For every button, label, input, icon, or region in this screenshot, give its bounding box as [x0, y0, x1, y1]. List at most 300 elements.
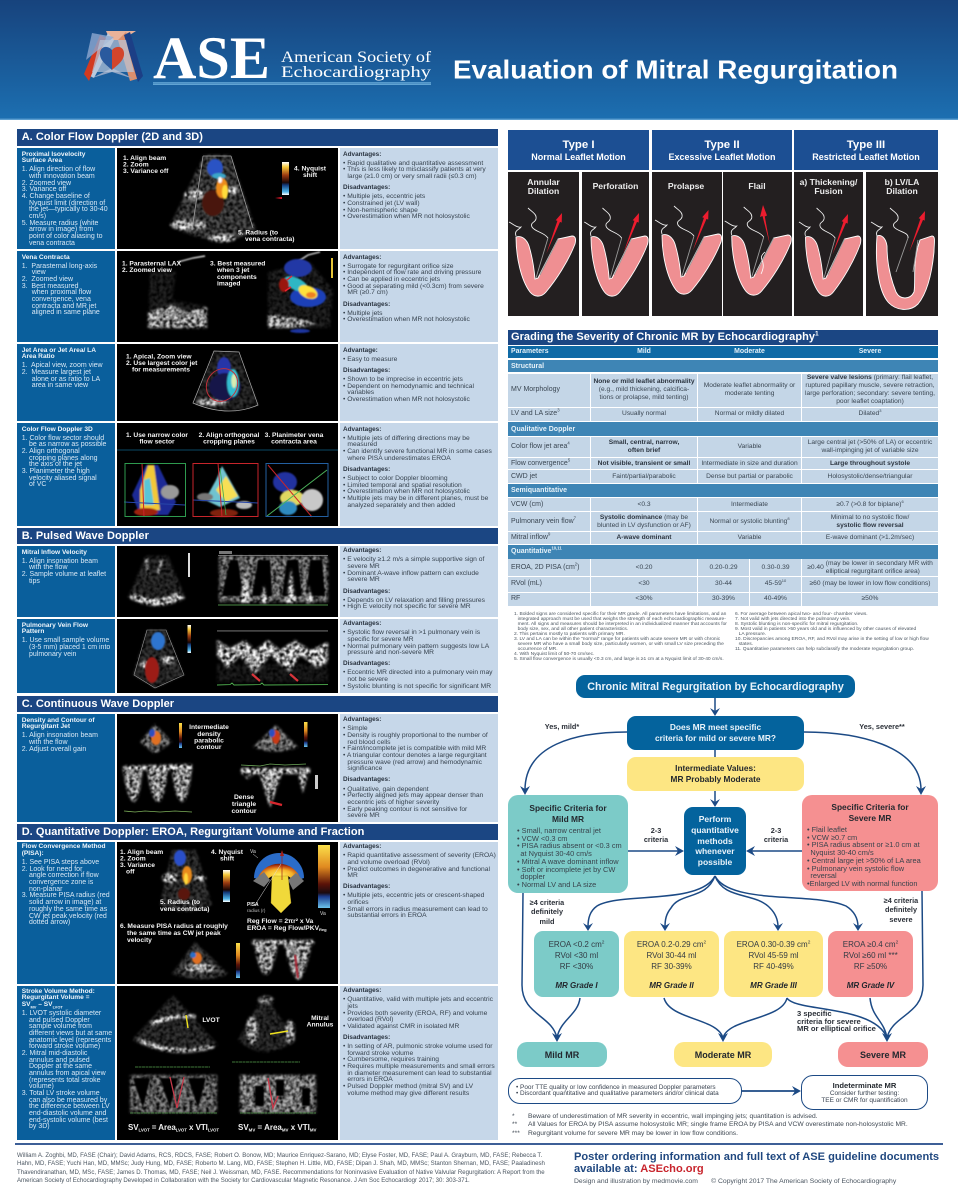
flow label: 2-3 criteria left: 2-3 — [651, 826, 661, 835]
flowchart title — [576, 675, 855, 698]
panel: pulmonary vein pros and cons: Advantages: — [343, 620, 381, 627]
panel: PISA pros and cons: large (≥1.0 cm) or very small radii (≤0.3 cm) — [347, 173, 477, 180]
design and copyright line: Design and illustration by medmovie.com © Copyright 2017 The American Society of Echocardiography — [574, 1178, 896, 1184]
panel: pulmonary vein pros and cons: pressure and non-severe MR — [347, 649, 434, 656]
table footnotes: left: 4. With Nyquist limit of 50-70 cm/sec. — [514, 652, 594, 657]
indeterminate MR box: TEE or CMR for quantification — [821, 1096, 908, 1104]
panel: pulmonary vein pros and cons: • Systolic blunting is not specific for significant MR — [343, 683, 491, 690]
panel: stroke volume method steps: SVMV – SVLVOT — [22, 1001, 63, 1009]
row: flow convergence — [508, 457, 938, 469]
image: stroke volume echo and Doppler: MV — [249, 1127, 255, 1132]
diagram: perforation — [582, 172, 649, 316]
table footnotes: left — [514, 612, 727, 662]
panel: stroke volume method steps: 3. Total LV stroke volume — [22, 1090, 100, 1097]
row: LV and LA size: Dilated3 — [859, 408, 881, 417]
image: stroke volume echo and Doppler: = Area — [150, 1123, 176, 1132]
table footnotes: left: integrated approach must be used that weighs the strength of each echocardiographic measure- — [518, 617, 726, 622]
row: VCW — [508, 498, 938, 511]
panel: PISA method pros and cons: and volume overload (RVol) — [347, 859, 430, 866]
panel: stroke volume method steps: 1. LVOT systolic diameter — [22, 1010, 101, 1017]
flow label: 3 specific criteria: MR or elliptical orifice — [797, 1024, 876, 1033]
flowchart footnotes: * — [512, 1113, 515, 1120]
panel: PISA method pros and cons: • Rapid quantitative assessment of severity (EROA) — [343, 852, 496, 859]
row: EROA: 0.20-0.29 — [709, 564, 738, 571]
logo wordmark — [153, 25, 432, 91]
flow label: at least 4 criteria severe: definitely — [885, 905, 917, 914]
image: jet area echo: 1. Apical, Zoom view — [126, 354, 192, 360]
diagram: LV and LA dilation — [866, 172, 938, 316]
row: pulmonary vein flow: Pulmonary vein flow7 — [511, 515, 576, 525]
row: CWD jet: Dense but partial or parabolic — [706, 473, 793, 480]
panel: vena contracta steps: Vena Contracta — [22, 254, 70, 261]
panel: pulmonary vein steps: Pattern — [22, 628, 44, 635]
row: CWD jet: Faint/partial/parabolic — [612, 473, 676, 480]
row: color flow jet area: Variable — [738, 443, 761, 450]
flowchart footnotes: Regurgitant volume for severe MR may be lower in low flow conditions. — [528, 1130, 738, 1137]
heading: section D — [17, 824, 498, 840]
severe criteria box — [802, 795, 938, 891]
panel: 3D Doppler steps: Color Flow Doppler 3D — [22, 426, 93, 433]
grade I box — [534, 931, 619, 997]
panel: stroke volume method steps: can also be measured by — [29, 1097, 107, 1104]
panel: stroke volume method steps: end-systolic volume (best — [29, 1117, 108, 1124]
panel: PISA steps: Proximal Isovelocity — [22, 151, 85, 158]
panel: mitral inflow pros and cons: • Dominant A-wave inflow pattern can exclude — [343, 570, 479, 577]
flow label: 3 specific criteria: 3 specific — [797, 1009, 832, 1018]
row: mitral inflow: E-wave dominant (>1.2m/sec) — [826, 534, 914, 541]
row: MV morphology: ruptured papillary muscle, severe retraction, — [805, 382, 935, 389]
panel: pulmonary vein pros and cons: Disadvantages: — [343, 660, 390, 667]
image: PISA diagram and echo: Va — [250, 849, 256, 855]
diagram: flail: Flail — [748, 181, 766, 191]
grade IV box: EROA ≥0.4 cm2 — [843, 940, 898, 949]
panel: CW density pros and cons: • Simple — [343, 725, 368, 732]
severe criteria box: •Enlarged LV with normal function — [807, 879, 918, 888]
panel: pulmonary vein steps: (3-5 mm) placed 1 cm into — [29, 644, 110, 651]
heading: section A: A. Color Flow Doppler (2D and 3D) — [22, 131, 203, 143]
image: PISA color Doppler echo: 5. Radius (to — [238, 230, 278, 236]
severe criteria box: Nyquist 30-40 cm/s — [810, 848, 874, 857]
panel: stroke volume pros and cons: • Pulsed Doppler method (mitral SV) and LV — [343, 1083, 473, 1090]
diagram: LV and LA dilation: b) LV/LA — [885, 177, 919, 187]
indeterminate MR box — [801, 1075, 928, 1110]
image: 3D Doppler crops: 1. Use narrow color — [126, 432, 188, 439]
panel: stroke volume method steps: annulus and pulsed — [29, 1057, 90, 1064]
table footnotes: right: 11. Quantitative parameters can help subclassify the moderate regurgitation group. — [735, 647, 914, 652]
image: PISA diagram and echo: 6. Measure PISA radius at roughly — [120, 923, 228, 930]
panel: PISA method steps: dotted arrow) — [29, 919, 70, 926]
row: RF: RF — [511, 595, 520, 602]
image: CW Doppler jets: triangle — [232, 801, 256, 808]
image: vena contracta echo: 2. Zoomed view — [122, 267, 173, 274]
author credits: Thavendiranathan, MD, MSc, FASE; James D. Thomas, MD, FASE; Neil J. Weissman, MD, FASE. Recommendations for Noninvasive Evaluation of Native Valvular Regurgitation: A Report from the — [17, 1169, 545, 1176]
image: PISA color Doppler echo: shift — [303, 172, 318, 179]
grade II box: RF 30-39% — [651, 962, 692, 971]
panel: CW density pros and cons: Disadvantages: — [343, 776, 390, 783]
heading: Type III: Restricted Leaflet Motion — [812, 152, 920, 162]
image: PISA diagram and echo: Va — [320, 911, 326, 917]
panel: PISA steps: 3. Variance off — [22, 186, 66, 193]
panel: 3D Doppler steps — [17, 423, 115, 526]
panel: vena contracta pros and cons — [340, 251, 498, 342]
image: stroke volume echo and Doppler: LVOT — [139, 1127, 150, 1132]
row: EROA — [508, 559, 938, 576]
row: EROA: ≥0.40 — [807, 564, 824, 571]
image: stroke volume echo and Doppler: MV — [310, 1127, 316, 1132]
severe criteria box: reversal — [810, 871, 837, 880]
panel: stroke volume pros and cons: • Requires multiple measurements and small errors — [343, 1063, 495, 1070]
panel: stroke volume method steps: forward stroke volume) — [29, 1043, 100, 1050]
poster ordering information: available at: ASEcho.org — [574, 1163, 704, 1175]
image: PISA diagram and echo: Reg — [319, 927, 327, 932]
panel: stroke volume method steps: the difference between LV — [29, 1103, 110, 1110]
flowchart question box: criteria for mild or severe MR? — [655, 733, 776, 743]
row: pulmonary vein flow — [508, 512, 938, 531]
panel: jet area steps: Jet Area or Jet Area/ LA — [22, 347, 96, 354]
image: jet area echo: 2. Use largest color jet — [126, 360, 198, 367]
panel: stroke volume method steps: Regurgitant Volume = — [22, 994, 90, 1001]
table footnotes: right: LA pressure. — [739, 632, 766, 637]
flow label: yes mild: Yes, mild* — [545, 722, 579, 731]
image: vena contracta echo: 3. Best measured — [210, 260, 265, 268]
panel: CW density steps — [17, 714, 115, 822]
flowchart intermediate values box: MR Probably Moderate — [671, 774, 760, 784]
table footnotes: right: 8. Systolic blunting is non-specific for mitral regurgitation. — [735, 622, 858, 627]
panel: PISA pros and cons: Disadvantages: — [343, 184, 390, 191]
table footnotes: left: body size, sex, and all other patient characteristics. — [518, 627, 628, 632]
panel: PISA steps: cm/s) — [29, 213, 46, 220]
outcome: mild MR — [517, 1042, 607, 1067]
row: RF: 30-39% — [712, 595, 735, 602]
panel: vena contracta pros and cons: • Independent of flow rate and driving pressure — [343, 269, 481, 276]
row: pulmonary vein flow: Systolic dominance (may be — [600, 514, 688, 521]
image: jet area echo: for measurements — [132, 366, 190, 374]
heading: grading table title — [508, 330, 938, 345]
image: 3D Doppler crops: 2. Align orthogonal — [199, 432, 259, 439]
image: CW Doppler jets: Dense — [234, 794, 254, 801]
image: CW Doppler jets — [117, 714, 338, 822]
flow label: at least 4 criteria mild: ≥4 criteria — [530, 898, 564, 907]
section: structural: Structural — [511, 362, 544, 370]
panel: vena contracta steps: convergence, vena — [32, 296, 91, 303]
image: PISA diagram and echo: 5. Radius (to — [160, 899, 200, 906]
panel: 3D Doppler pros and cons: • Overestimation when MR not holosystolic — [343, 488, 470, 495]
panel: CW density pros and cons: significance — [347, 765, 382, 772]
flow label: 2-3 criteria left: criteria — [644, 835, 668, 844]
row: VCW: <0.3 — [637, 501, 651, 508]
row: RF: ≥50% — [862, 595, 878, 602]
panel: stroke volume method steps: 2. Mitral mid-diastolic — [22, 1050, 87, 1057]
row: MV morphology — [508, 374, 938, 407]
severe criteria box: Severe MR — [849, 812, 891, 822]
image: PISA diagram and echo: PISA — [247, 902, 259, 908]
severe criteria box: • Central large jet >50% of LA area — [807, 856, 921, 865]
row: pulmonary vein flow: blunted in LV dysfunction or AF) — [597, 522, 691, 528]
panel: 3D Doppler pros and cons: • Limited temporal and spatial resolution — [343, 482, 462, 489]
panel: stroke volume pros and cons: overload (RVol) — [347, 1016, 393, 1023]
panel: vena contracta steps: 3. Best measured — [22, 283, 78, 290]
caveats box: • Poor TTE quality or low confidence in measured Doppler parameters — [516, 1084, 716, 1091]
panel: 3D Doppler pros and cons: analyzed separately and then added — [347, 502, 455, 509]
panel: stroke volume pros and cons: errors in EROA — [347, 1076, 393, 1083]
panel: stroke volume pros and cons: • Quantitative, valid with multiple jets and eccentric — [343, 996, 493, 1003]
footer rule — [15, 1143, 943, 1145]
image: mitral inflow echo and Doppler — [117, 546, 338, 617]
panel: vena contracta pros and cons: • Surrogate for regurgitant orifice size — [343, 263, 454, 270]
panel: pulmonary vein pros and cons: • Eccentric MR directed into a pulmonary vein may — [343, 669, 493, 676]
row: LV and LA size — [508, 408, 938, 421]
row: pulmonary vein flow: systolic flow reversal — [836, 522, 904, 528]
flowchart intermediate values box — [627, 757, 804, 791]
flow label: 2-3 criteria right: criteria — [764, 835, 788, 844]
table footnotes: right: states. — [739, 642, 753, 647]
section: semiquantitative — [508, 484, 938, 497]
row: flow convergence: Intermediate in size and duration — [701, 460, 798, 467]
panel: 3D Doppler pros and cons: • Multiple jets may be in different planes, must be — [343, 495, 488, 502]
panel: CW density pros and cons: severe MR — [347, 812, 380, 819]
image: stroke volume echo and Doppler: x VTI — [187, 1123, 208, 1132]
image: PISA diagram and echo: 4. Nyquist — [211, 849, 244, 856]
row: color flow jet area: often brief — [628, 447, 660, 454]
row: MV morphology: MV Morphology — [511, 386, 560, 393]
table footnotes: right: 10. Discrepancies among EROA, RF, and RVol may arise in the setting of low or high flow — [735, 637, 929, 642]
panel: 3D Doppler pros and cons — [340, 423, 498, 526]
panel: PISA method steps: 2. Look for need for — [22, 866, 82, 873]
panel: 3D Doppler steps: 1. Color flow sector should — [22, 435, 104, 442]
panel: jet area steps: 2. Measure largest jet — [22, 369, 91, 376]
image: PISA diagram and echo: Reg Flow = 2πr² x Va — [247, 918, 314, 925]
panel: PISA method steps: 1. See PISA steps above — [22, 859, 99, 866]
table footnotes: left: 3. LV and LA can be within the "normal" range for patients with acute severe MR or with chronic — [514, 637, 720, 642]
image: PISA diagram and echo: vena contracta) — [160, 906, 209, 913]
diagram: thickening and fusion: a) Thickening/ — [800, 177, 858, 187]
panel: stroke volume method steps: by 3D) — [29, 1123, 50, 1130]
panel: 3D Doppler pros and cons: where PISA underestimates EROA — [347, 455, 451, 462]
panel: PISA steps: point of color aliasing to — [29, 233, 103, 240]
row: color flow jet area: Color flow jet area4 — [511, 440, 570, 450]
panel: jet area pros and cons: • Dependent on hemodynamic and technical — [343, 383, 474, 390]
panel: CW density pros and cons: • A triangular contour denotes a large regurgitant — [343, 752, 487, 759]
panel: stroke volume method steps: and pulsed Doppler — [29, 1017, 90, 1024]
panel: PISA steps: 2. Zoomed view — [22, 180, 71, 187]
panel: jet area pros and cons: • Easy to measure — [343, 356, 397, 363]
table footnotes: right: 9. Most valid in patients >50 years old and is influenced by other causes of elevated — [735, 627, 916, 632]
image: stroke volume echo and Doppler: LVOT — [176, 1127, 187, 1132]
panel: PISA method steps: angle correction if flow — [29, 872, 99, 879]
flowchart question box — [627, 716, 804, 750]
row: MV morphology: (e.g., mild thickening, calcifica- — [599, 386, 689, 393]
flowchart footnotes: All Values for EROA by PISA assume holosystolic MR; single frame EROA by PISA and VCW overestimate non-holosystolic MR. — [528, 1121, 908, 1128]
panel: pulmonary vein steps: pulmonary vein — [29, 651, 76, 658]
outcome: moderate MR: Moderate MR — [695, 1050, 751, 1060]
panel: mitral inflow pros and cons — [340, 546, 498, 617]
panel: stroke volume pros and cons: Advantages: — [343, 987, 381, 994]
row: MV morphology: poor leaflet coaptation) — [836, 398, 904, 405]
panel: CW density steps: Density and Contour of — [22, 717, 95, 724]
heading: Type I — [508, 130, 649, 170]
panel: mitral inflow steps: with the flow — [29, 564, 68, 571]
panel: stroke volume method steps — [17, 986, 115, 1140]
heading: section B: B. Pulsed Wave Doppler — [22, 530, 149, 542]
row: mitral inflow: Mitral inflow9 — [511, 532, 550, 541]
panel: PISA method steps: CW jet peak velocity (red — [29, 912, 107, 920]
panel: 3D Doppler pros and cons: • Can identify severe functional MR in some cases — [343, 448, 492, 455]
panel: 3D Doppler steps: 2. Align orthogonal — [22, 448, 80, 455]
panel: PISA steps — [17, 148, 115, 249]
row: pulmonary vein flow: Minimal to no systolic flow/ — [831, 514, 909, 521]
heading: section B — [17, 528, 498, 544]
row: VCW: VCW (cm) — [511, 501, 543, 508]
panel: PISA method pros and cons: Disadvantages: — [343, 883, 390, 890]
panel: mitral inflow steps: Mitral Inflow Velocity — [22, 549, 87, 556]
table header row: Parameters — [511, 348, 549, 355]
panel: stroke volume method steps: (represents total stroke — [29, 1077, 101, 1084]
diagram: LV and LA dilation: Dilation — [886, 186, 918, 196]
image: PISA diagram and echo: 3. Variance — [120, 862, 155, 869]
image: CW Doppler jets: contour — [232, 808, 257, 815]
section: structural — [508, 360, 938, 372]
panel: stroke volume method steps: volume) — [29, 1083, 54, 1090]
indeterminate MR box: Indeterminate MR — [833, 1080, 896, 1090]
image: jet area echo — [117, 344, 338, 421]
author credits: American Society of Echocardiography Developed in Collaboration with the Society for Cardiovascular Magnetic Resonance. J Am Soc Echocardiogr 2017; 30: 303-371. — [17, 1177, 470, 1184]
panel: pulmonary vein steps: Pulmonary Vein Flow — [22, 622, 88, 629]
row: MV morphology: Moderate leaflet abnormality or — [704, 382, 795, 389]
row: flow convergence: Flow convergence5 — [511, 457, 570, 467]
heading: Type I: Normal Leaflet Motion — [531, 152, 626, 162]
panel: mitral inflow pros and cons: • Depends on LV relaxation and filling pressures — [343, 597, 485, 604]
panel: PISA method pros and cons — [340, 842, 498, 984]
panel: stroke volume method steps: Stroke Volume Method: — [22, 988, 95, 995]
grade II box: MR Grade II — [649, 981, 694, 990]
panel: CW density steps: with the flow — [29, 739, 68, 746]
panel: stroke volume pros and cons: • In setting of AR, pulmonic stroke volume used for — [343, 1043, 493, 1050]
severe criteria box: • VCW ≥0.7 cm — [807, 833, 857, 842]
image: 3D Doppler crops — [117, 423, 338, 526]
panel: vena contracta pros and cons: • Overestimation when MR not holosystolic — [343, 316, 470, 323]
panel: pulmonary vein pros and cons: • Normal pulmonary vein pattern suggests low LA — [343, 643, 489, 650]
panel: stroke volume pros and cons: in diameter measurement can lead to substantial — [347, 1070, 492, 1077]
panel: CW density steps: Regurgitant Jet — [22, 723, 70, 730]
panel: vena contracta pros and cons: Disadvantages: — [343, 300, 390, 308]
grade I box: EROA <0.2 cm2 — [549, 940, 604, 949]
diagram: prolapse: Prolapse — [668, 181, 704, 191]
row: CWD jet: Holosystolic/dense/triangular — [828, 473, 912, 480]
diagram: thickening and fusion: Fusion — [814, 186, 843, 196]
panel: PISA method pros and cons: MR — [347, 872, 358, 879]
flowchart footnotes: ** — [512, 1121, 517, 1128]
panel: PISA steps: 5. Measure radius (white — [22, 220, 98, 227]
image: PISA diagram and echo: EROA = Reg Flow/PKV — [247, 925, 319, 932]
flowchart quantitative methods box: quantitative — [691, 825, 739, 835]
panel: vena contracta pros and cons: MR (≥0.7 cm) — [347, 289, 388, 296]
diagram: flail — [723, 172, 792, 316]
panel: vena contracta steps: contracta and MR jet — [32, 303, 96, 310]
row: EROA: 0.30-0.39 — [761, 564, 790, 571]
panel: stroke volume method steps: annulus from apical view — [29, 1070, 106, 1077]
panel: CW density steps: 1. Align insonation beam — [22, 732, 98, 739]
flow label: 3 specific criteria — [797, 1009, 876, 1033]
image: PISA diagram and echo: 1. Align beam — [120, 849, 163, 856]
panel: stroke volume pros and cons: • Cumbersome, requires training — [343, 1056, 439, 1063]
panel: PISA pros and cons: • Rapid qualitative and quantitative assessment — [343, 160, 483, 167]
panel: mitral inflow pros and cons: • E velocity ≥1.2 m/s a simple supportive sign of — [343, 556, 484, 563]
image: stroke volume echo and Doppler: x VTI — [288, 1123, 310, 1132]
panel: stroke volume pros and cons: • Validated against CMR in isolated MR — [343, 1023, 459, 1030]
panel: mitral inflow pros and cons: severe MR — [347, 576, 380, 583]
image: CW Doppler jets: Intermediate — [189, 724, 229, 731]
flowchart quantitative methods box: possible — [698, 857, 732, 867]
title: Evaluation of Mitral Regurgitation — [453, 56, 898, 84]
panel: vena contracta pros and cons: • Can be applied in eccentric jets — [343, 276, 440, 283]
grade III box — [724, 931, 823, 997]
image: stroke volume echo and Doppler: SV — [238, 1123, 249, 1132]
table footnotes: left: occurrence of MR. — [518, 647, 558, 652]
section: qualitative Doppler — [508, 422, 938, 436]
row: RVol — [508, 577, 938, 592]
image: pulmonary vein echo and Doppler — [117, 619, 338, 693]
panel: stroke volume method steps: Doppler at the same — [29, 1063, 92, 1070]
table footnotes: left: 5. Small flow convergence is usually <0.3 cm, and large is ≥1 cm at a Nyquist limit of 30-40 cm/s. — [514, 657, 724, 662]
grade I box: RVol <30 ml — [555, 951, 598, 960]
severe criteria box: • Flail leaflet — [807, 825, 847, 834]
icon: ASE logo — [84, 31, 143, 82]
panel: 3D Doppler steps: 3. Planimeter the high — [22, 468, 90, 475]
flow label: 2-3 criteria right — [764, 826, 788, 844]
diagram: thickening and fusion — [794, 172, 863, 316]
image: PISA color Doppler echo: 1. Align beam — [123, 155, 166, 162]
heading: section D: D. Quantitative Doppler: EROA, Regurgitant Volume and Fraction — [22, 826, 364, 838]
flowchart question box: Does MR meet specific — [670, 722, 761, 732]
mild criteria box: • PISA radius absent or <0.3 cm — [517, 841, 622, 850]
panel: PISA method pros and cons: Advantages: — [343, 843, 381, 850]
panel: pulmonary vein pros and cons: not be severe — [347, 676, 388, 683]
flowchart quantitative methods box — [684, 807, 746, 875]
image: PISA diagram and echo: off — [126, 868, 135, 876]
indeterminate MR box: Consider further testing: — [830, 1090, 899, 1096]
panel: 3D Doppler pros and cons: • Subject to color Doppler blooming — [343, 475, 448, 482]
image: stroke volume echo and Doppler: Annulus — [307, 1022, 334, 1029]
panel: mitral inflow pros and cons: Advantages: — [343, 547, 381, 554]
author credits: Hahn, MD, FASE; Yuchi Han, MD, MMSc; Judy Hung, MD, FASE; Roberto M. Lang, MD, FASE; Stephen H. Little, MD, FASE; Dipan J. Shah, MD, MMSc; Stanton Shernan, MD, FASE; Paaladinesh — [17, 1160, 545, 1167]
heading: section A — [17, 129, 498, 146]
panel: mitral inflow steps: tips — [29, 578, 40, 585]
grade I box: RF <30% — [560, 962, 593, 971]
mild criteria box: • Mitral A wave dominant inflow — [517, 857, 619, 866]
panel: stroke volume method steps: end-diastolic volume and — [29, 1110, 106, 1117]
heading: Type III — [794, 130, 938, 170]
panel: jet area pros and cons: variables — [347, 389, 374, 396]
grade IV box: RVol ≥60 ml *** — [843, 951, 898, 960]
flow label: at least 4 criteria mild — [530, 898, 564, 926]
mild criteria box: Mild MR — [552, 814, 584, 824]
mild criteria box: • Normal LV and LA size — [517, 880, 596, 889]
flow label: at least 4 criteria severe: severe — [889, 915, 913, 924]
row: pulmonary vein flow: Normal or systolic blunting8 — [709, 515, 790, 525]
panel: PISA pros and cons — [340, 148, 498, 249]
panel: jet area steps: 1. Apical view, zoom view — [22, 362, 103, 369]
row: RVol: 30-44 — [715, 580, 732, 587]
panel: PISA pros and cons: • This is less likely to misclassify patients at very — [343, 166, 486, 173]
severe criteria box: • Pulmonary vein systolic flow — [807, 864, 904, 873]
panel: CW density pros and cons: Advantages: — [343, 716, 381, 723]
section: qualitative Doppler: Qualitative Doppler — [511, 426, 575, 432]
row: CWD jet: CWD jet — [511, 473, 537, 480]
row: color flow jet area: Small, central, narrow, — [609, 439, 679, 446]
caveats box: • Discordant quantitative and qualitative parameters and/or clinical data — [516, 1090, 719, 1097]
row: RF: <30% — [635, 595, 653, 602]
logo wordmark: ASE — [153, 25, 270, 91]
